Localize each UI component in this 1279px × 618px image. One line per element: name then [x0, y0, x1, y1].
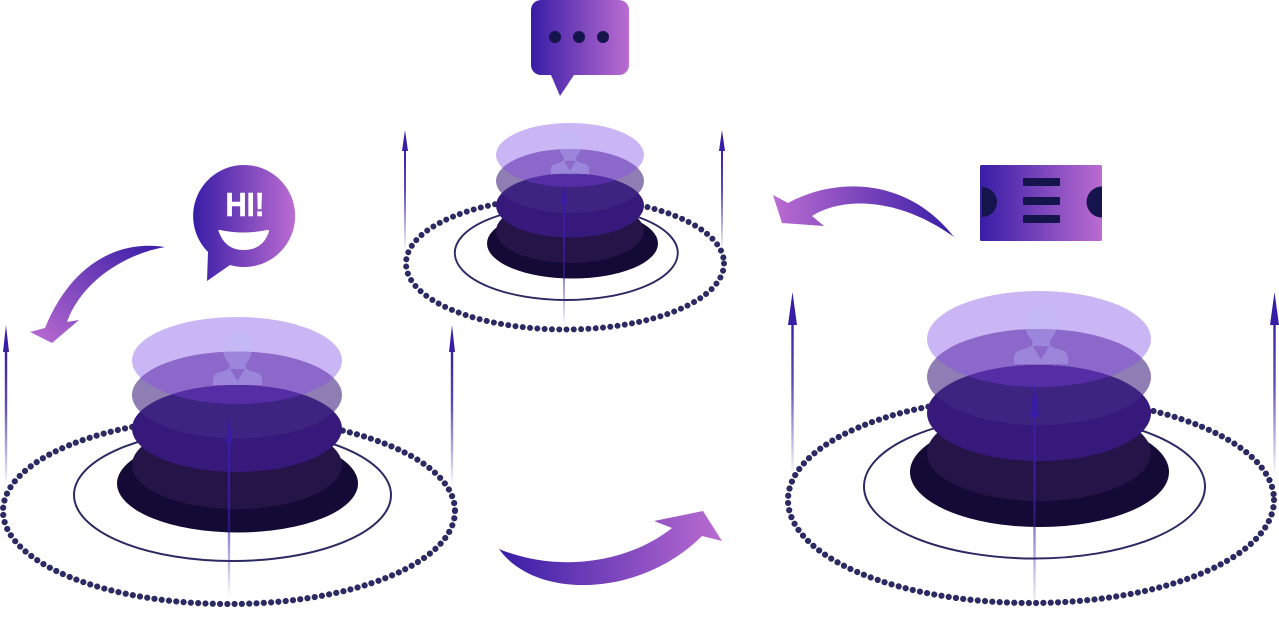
- inner ring: [74, 429, 391, 561]
- arrow: right vertical: [1270, 292, 1279, 476]
- dotted outer ring: [788, 397, 1274, 603]
- disc stack: [910, 291, 1169, 527]
- bubble text: HI!: [226, 186, 264, 223]
- panel: middle stacked rings: [402, 123, 725, 330]
- smile: [218, 230, 269, 250]
- inner ring: [864, 414, 1205, 558]
- panel: right stacked rings: [788, 291, 1279, 610]
- icon: ticket card: [980, 165, 1102, 241]
- icon: person: [1014, 306, 1068, 364]
- dotted outer ring: [406, 198, 724, 330]
- disc stack: [117, 317, 358, 532]
- arrow: curved from left stack to right stack: [499, 511, 722, 585]
- arrow: right vertical: [719, 130, 725, 251]
- arrow: center vertical: [226, 415, 232, 598]
- arrow: right vertical: [449, 325, 455, 486]
- arrow: curved from ticket to middle stack: [773, 186, 954, 237]
- arrow: left vertical: [3, 325, 9, 486]
- arrow: left vertical: [788, 292, 797, 476]
- icon: person: [213, 333, 262, 385]
- panel: left stacked rings: [3, 317, 455, 604]
- icon: typing speech bubble: [531, 0, 629, 96]
- arrow: center vertical: [561, 183, 567, 327]
- icon: person: [551, 131, 589, 174]
- dotted outer ring: [3, 418, 455, 604]
- arrow: left vertical: [402, 130, 408, 251]
- arrow: center vertical: [1030, 383, 1039, 610]
- disc stack: [487, 123, 658, 278]
- arrow: curved from HI bubble down to left stack: [30, 246, 165, 343]
- icon: HI speech bubble: [193, 165, 295, 281]
- inner ring: [455, 206, 678, 300]
